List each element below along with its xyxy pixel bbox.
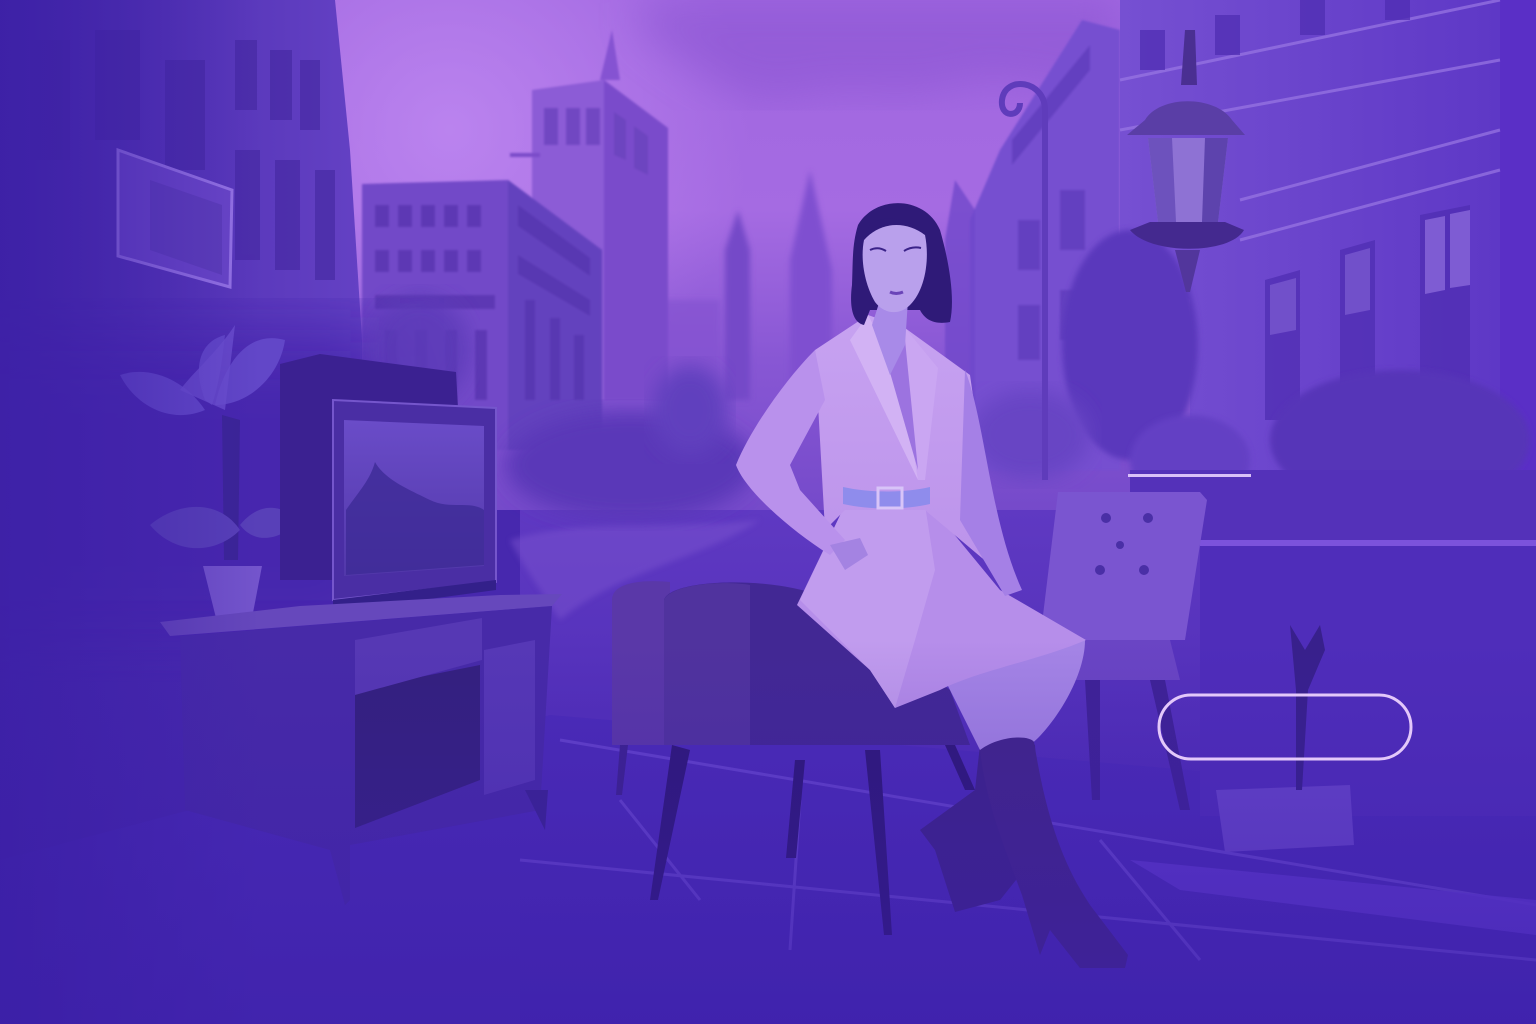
hair back	[851, 203, 952, 325]
front lower leg	[945, 640, 1085, 750]
CRT television	[280, 354, 496, 612]
belt	[843, 487, 930, 508]
plant	[120, 325, 298, 618]
right foreground building	[1120, 0, 1536, 540]
sky	[0, 0, 1536, 600]
empty pill outline	[1159, 695, 1411, 759]
left sleeve and hand	[736, 350, 868, 570]
right sleeve	[960, 370, 1022, 596]
button chair behind	[1030, 492, 1207, 810]
skirt	[797, 505, 1086, 708]
right hedge and balcony	[1130, 370, 1536, 816]
wall-mounted sign panel	[118, 150, 232, 287]
hanging lantern	[1127, 30, 1245, 292]
mid-distance office block	[362, 180, 602, 450]
jacket torso	[815, 315, 1020, 590]
distant skyline	[660, 170, 832, 420]
woman seated	[736, 203, 1128, 968]
foreground armchair	[650, 582, 975, 935]
small sofa behind	[612, 581, 670, 795]
front boot	[980, 737, 1128, 968]
umbrella stand and box	[1216, 625, 1354, 852]
left foreground buildings	[0, 0, 362, 560]
trees in mid distance	[370, 230, 1198, 520]
short accent rule	[1128, 474, 1251, 477]
central tower	[510, 30, 668, 400]
street and plaza	[0, 510, 1536, 1024]
neck and face	[863, 219, 927, 375]
wooden cabinet	[160, 594, 562, 905]
street lamp post	[1002, 84, 1045, 480]
right-side mid buildings	[945, 20, 1120, 470]
left wall haze blending into ground	[0, 330, 400, 650]
rear leg and boot	[920, 739, 1040, 912]
